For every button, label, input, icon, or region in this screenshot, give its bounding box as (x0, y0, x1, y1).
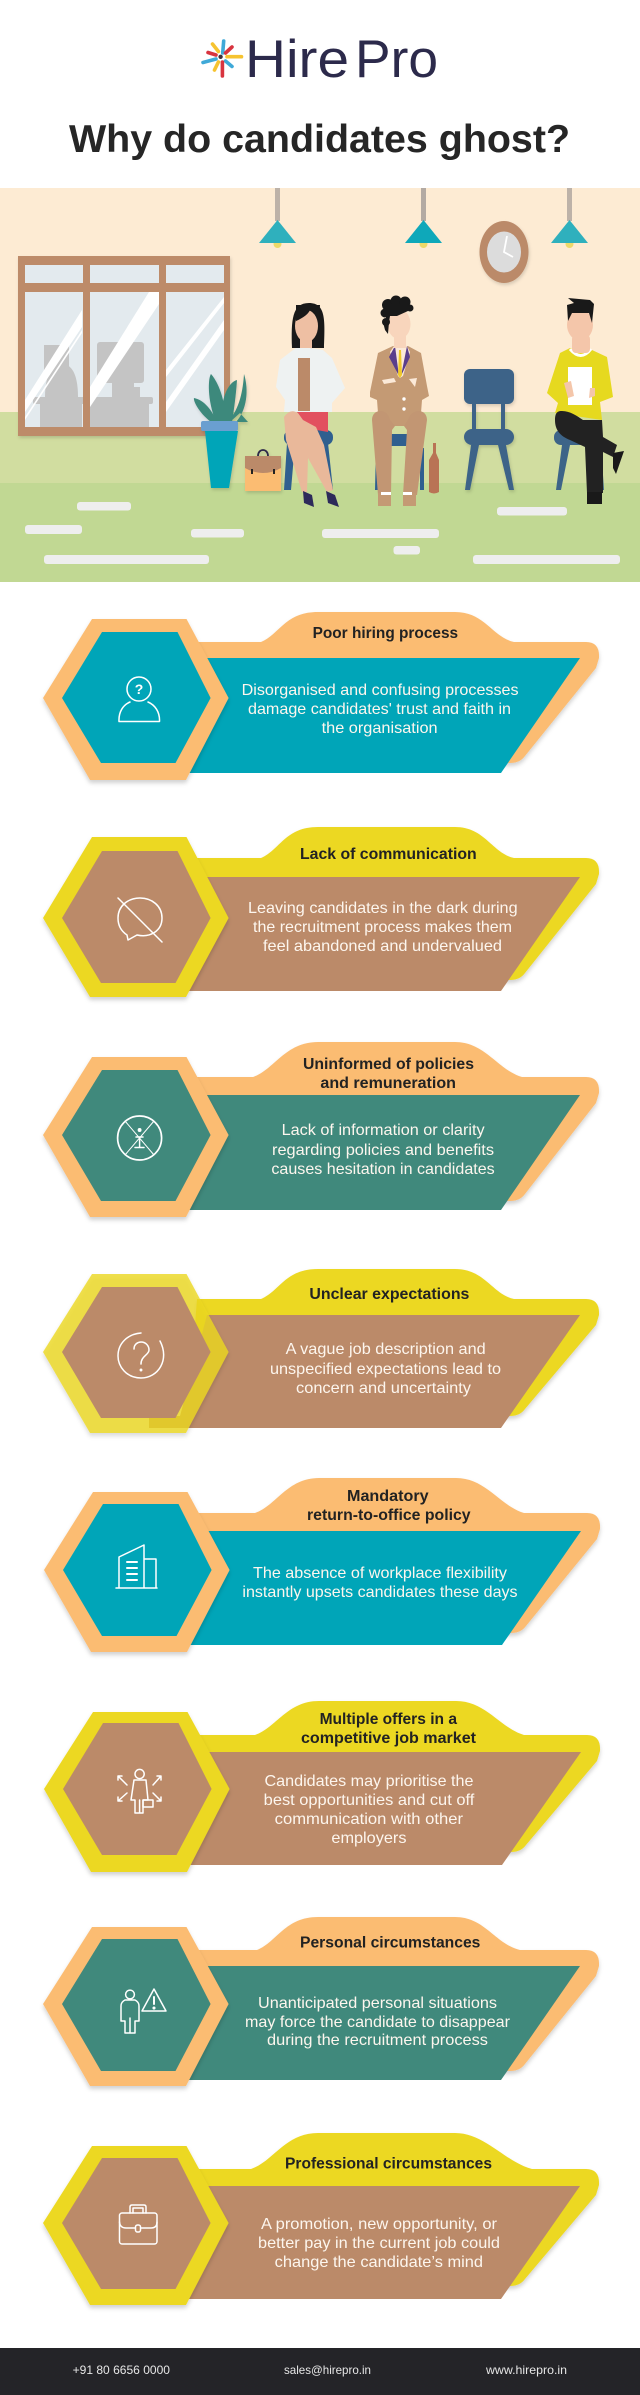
heading: Mandatory (347, 1488, 429, 1505)
hands (564, 381, 595, 398)
card 7: Personal circumstances (43, 1917, 599, 2086)
body text: change the candidate’s mind (275, 2254, 483, 2271)
trousers (555, 411, 617, 493)
panel (188, 1966, 580, 2080)
website: www.hirepro.in (485, 2363, 567, 2377)
body text: Unanticipated personal situations (258, 1995, 497, 2012)
person: woman on chair (276, 303, 345, 507)
panel (188, 1095, 580, 1210)
chair (284, 372, 333, 490)
body text: regarding policies and benefits (272, 1142, 494, 1159)
illustration: waiting room (0, 188, 640, 582)
buttons (402, 397, 406, 401)
floor: front (0, 483, 640, 582)
window (18, 256, 230, 436)
heading: Professional circumstances (285, 2156, 492, 2172)
body text: damage candidates' trust and faith in (248, 701, 511, 718)
lamp 1 (259, 188, 296, 248)
plant in pot (194, 374, 248, 488)
hexagon (43, 1274, 229, 1433)
hair (567, 298, 594, 323)
body text: A vague job description and (286, 1341, 486, 1358)
chair (375, 434, 424, 490)
chair (554, 430, 604, 490)
shoes (303, 491, 339, 507)
body text: Lack of information or clarity (282, 1122, 485, 1139)
body text: Disorganised and confusing processes (242, 682, 519, 699)
card 4: Unclear expectations (43, 1269, 599, 1433)
person: man in suit on chair (370, 296, 439, 506)
lamp 2 (405, 188, 442, 248)
legs (372, 411, 427, 495)
body text: concern and uncertainty (296, 1380, 471, 1397)
neck and face (388, 309, 410, 348)
coat (276, 348, 345, 412)
body text: employers (331, 1830, 406, 1847)
body text: feel abandoned and undervalued (263, 938, 502, 955)
back band with tab (188, 2133, 599, 2286)
hexagon (43, 2146, 229, 2305)
icon: person and warning triangle (121, 1989, 166, 2033)
heading: competitive job market (301, 1730, 476, 1747)
crossed hands (382, 378, 417, 387)
body text: during the recruitment process (267, 2032, 488, 2049)
hexagon (43, 1057, 229, 1217)
heading: Multiple offers in a (320, 1711, 457, 1728)
hexagon (43, 837, 229, 997)
body text: better pay in the current job could (258, 2235, 500, 2252)
heading: Personal circumstances (300, 1934, 480, 1952)
back band with tab (188, 612, 599, 763)
hair (292, 303, 324, 348)
icon: person with arrows (118, 1769, 161, 1813)
card 3: Uninformed of policies and remuneration (43, 1042, 599, 1217)
body text: The absence of workplace flexibility (253, 1565, 507, 1582)
body text: communication with other (275, 1811, 464, 1828)
empty chair (464, 369, 514, 490)
floor tiles (25, 502, 620, 564)
legs (284, 411, 333, 492)
body text: may force the candidate to disappear (245, 2014, 511, 2031)
icon: logo star (203, 41, 242, 76)
icon: crossed speech bubble (118, 898, 162, 942)
card 1: Poor hiring process (43, 612, 599, 780)
heading: Uninformed of policies (303, 1056, 474, 1073)
panel (189, 1531, 581, 1645)
email: sales@hirepro.in (284, 2363, 371, 2377)
heading: Unclear expectations (309, 1286, 469, 1303)
clock (480, 221, 528, 283)
hexagon (43, 619, 229, 780)
lamp 3 (551, 188, 588, 248)
heading: Lack of communication (300, 846, 477, 863)
wall (0, 188, 640, 413)
footer bar (0, 2348, 640, 2395)
hexagon (43, 1927, 229, 2086)
body text: unspecified expectations lead to (270, 1361, 501, 1378)
face (295, 305, 320, 352)
logo: HirePro (203, 30, 438, 89)
panel (188, 658, 580, 773)
hexagon (44, 1492, 230, 1652)
heading: return-to-office policy (307, 1507, 471, 1524)
collar (570, 349, 591, 356)
body text: the organisation (322, 720, 438, 737)
body text: causes hesitation in candidates (271, 1161, 495, 1178)
floor: back strip (0, 412, 640, 484)
icon: office buildings (116, 1545, 157, 1588)
phone: +91 80 6656 0000 (73, 2363, 170, 2377)
back band with tab (188, 1269, 599, 1416)
panel (149, 1315, 580, 1428)
body text: Candidates may prioritise the (264, 1773, 474, 1790)
heading: Poor hiring process (313, 625, 458, 642)
card 5: Mandatory return-to-office policy (44, 1478, 600, 1652)
curly hair (380, 296, 414, 334)
panel (189, 1752, 581, 1865)
body text: Leaving candidates in the dark during (248, 900, 518, 917)
body text: the recruitment process makes them (253, 919, 512, 936)
back band with tab (189, 1478, 600, 1633)
heading: and remuneration (320, 1075, 456, 1092)
card 6: Multiple offers in a competitive job market (44, 1701, 600, 1872)
title: Why do candidates ghost? (69, 118, 570, 161)
panel (188, 877, 580, 991)
back band with tab (188, 1042, 599, 1201)
sweater (547, 348, 613, 420)
back band with tab (189, 1701, 600, 1852)
shirt and tie (390, 346, 410, 378)
skirt (297, 412, 328, 432)
icon: person with question mark (119, 677, 160, 722)
body text: best opportunities and cut off (264, 1792, 475, 1809)
person: man with paper (547, 298, 624, 504)
bag (245, 450, 281, 491)
icon: briefcase (120, 2205, 157, 2244)
suit jacket (370, 346, 429, 426)
icon: question mark in open circle (118, 1333, 164, 1378)
shoes (587, 451, 624, 504)
hexagon (44, 1712, 230, 1872)
body text: A promotion, new opportunity, or (261, 2216, 498, 2233)
card 8: Professional circumstances (43, 2133, 599, 2305)
logo wordmark: Hire (245, 30, 349, 89)
top (298, 358, 310, 411)
shoes (378, 493, 416, 506)
back band with tab (188, 1917, 599, 2071)
panel (188, 2186, 580, 2299)
icon: crossed circle with i (118, 1116, 162, 1160)
card 2: Lack of communication (43, 827, 599, 997)
body text: instantly upsets candidates these days (242, 1584, 518, 1601)
umbrella (429, 443, 439, 494)
back band with tab (188, 827, 599, 980)
logo wordmark: Pro (355, 30, 438, 89)
neck and head (567, 310, 593, 353)
icon: person with question mark: ? (135, 681, 143, 697)
paper (568, 367, 592, 405)
